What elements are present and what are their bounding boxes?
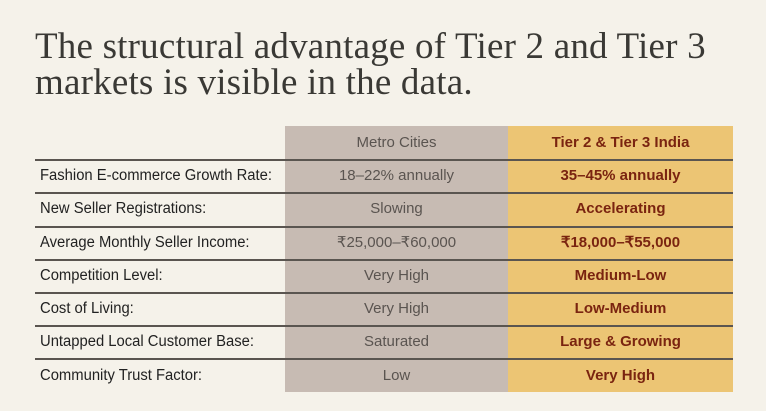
- row: trust: Low: [383, 367, 410, 384]
- column: tier 2/3 background: [508, 126, 733, 392]
- row: growth rate: Fashion E-commerce Growth Rate:: [40, 167, 272, 184]
- row: income: Average Monthly Seller Income:: [40, 234, 250, 251]
- row: customer base: Untapped Local Customer Base:: [40, 333, 254, 350]
- row: trust: [40, 367, 655, 384]
- row: cost of living: Very High: [364, 300, 429, 317]
- row: competition: [40, 267, 666, 284]
- row: competition: Competition Level:: [40, 267, 163, 284]
- row: growth rate: [40, 167, 681, 184]
- row: customer base: [40, 333, 681, 350]
- header row: Tier 2 & Tier 3 India: [552, 134, 689, 151]
- row: income: ₹18,000–₹55,000: [561, 234, 680, 251]
- title: The structural advantage of Tier 2 and Tier 3: [35, 26, 706, 67]
- row: cost of living: [40, 300, 666, 317]
- row: customer base: Large & Growing: [560, 333, 681, 350]
- row: trust: Community Trust Factor:: [40, 367, 202, 384]
- title: markets is visible in the data.: [35, 62, 473, 103]
- row: customer base: Saturated: [364, 333, 429, 350]
- row: cost of living: Cost of Living:: [40, 300, 134, 317]
- row: cost of living: Low-Medium: [575, 300, 666, 317]
- row: competition: Medium-Low: [575, 267, 666, 284]
- column: metro background: [285, 126, 508, 392]
- row: income: ₹25,000–₹60,000: [337, 234, 456, 251]
- header row: [356, 134, 690, 151]
- header row: Metro Cities: [356, 134, 437, 151]
- row: growth rate: 18–22% annually: [339, 167, 454, 184]
- row: seller registrations: New Seller Registrations:: [40, 200, 206, 217]
- row: seller registrations: [40, 200, 666, 217]
- row: seller registrations: Accelerating: [575, 200, 666, 217]
- title: [35, 26, 706, 103]
- row: growth rate: 35–45% annually: [560, 167, 681, 184]
- row: trust: Very High: [586, 367, 655, 384]
- row: competition: Very High: [364, 267, 429, 284]
- row: income: [40, 234, 680, 251]
- row: seller registrations: Slowing: [370, 200, 423, 217]
